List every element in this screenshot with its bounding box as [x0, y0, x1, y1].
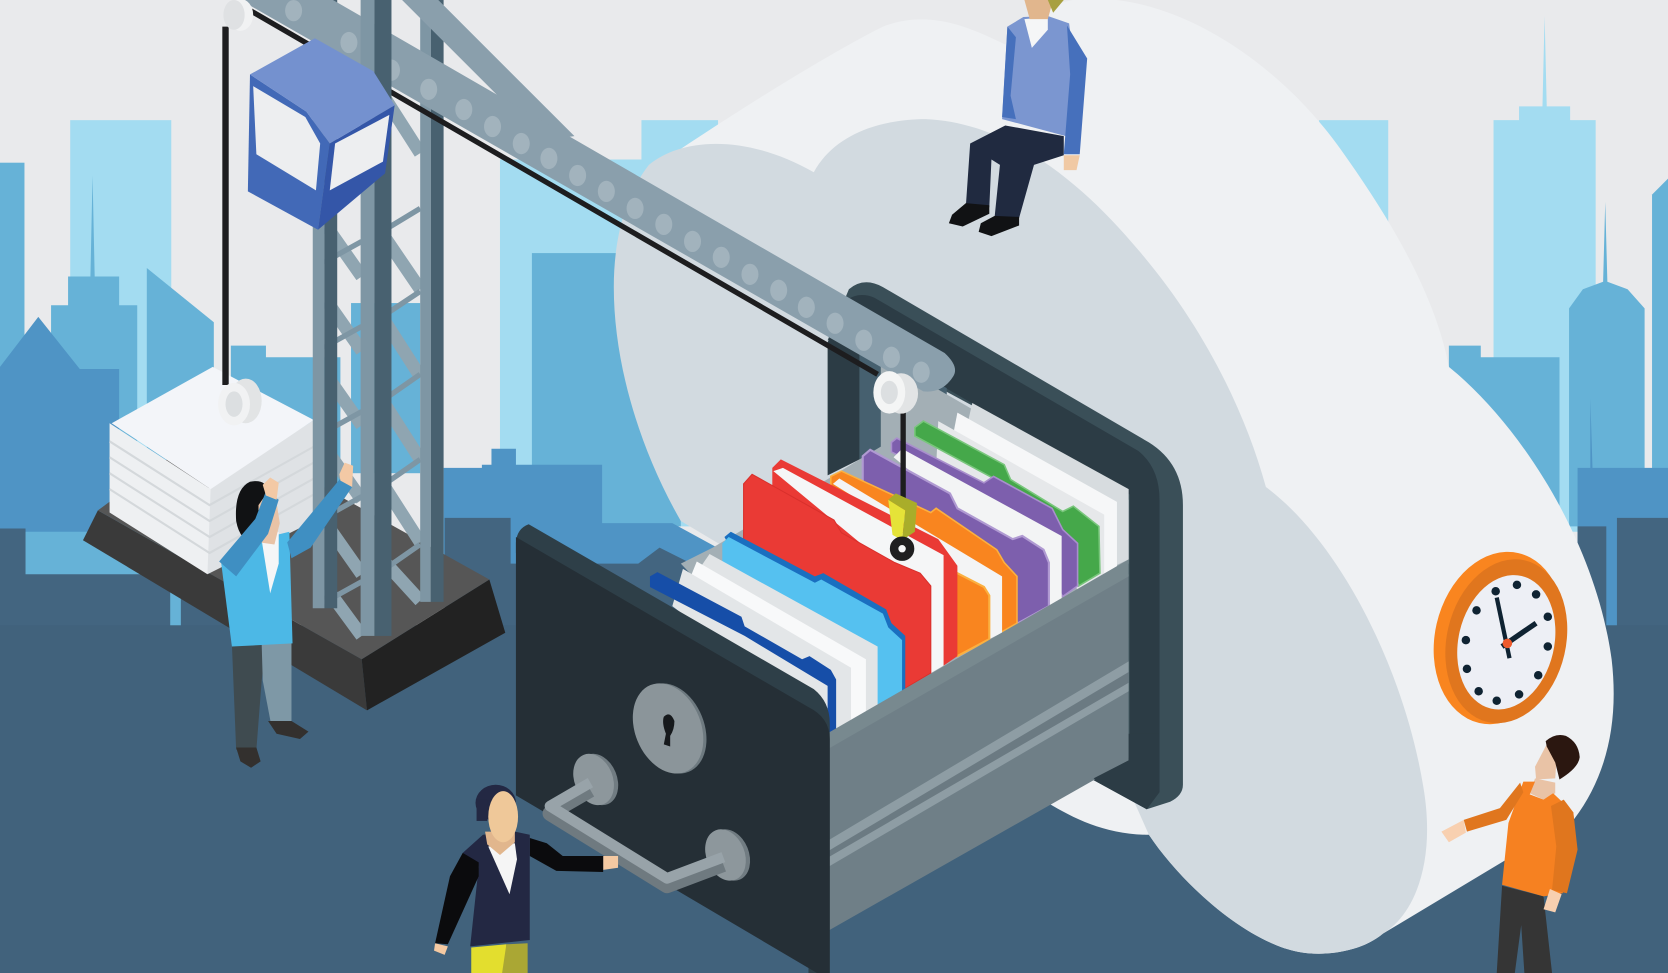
papers in front: [672, 554, 878, 732]
back papers: [936, 403, 1129, 590]
drawer front panel: [516, 524, 830, 973]
crane tower rear legs and lattice: [313, 0, 444, 636]
papers behind red: [773, 468, 944, 673]
crane boom: [240, 0, 955, 392]
crane cable: [226, 9, 903, 502]
dark blue front folder: [650, 572, 836, 734]
papers behind purple: [894, 449, 1062, 608]
hook pulley: [873, 371, 918, 414]
purple folder front: [863, 450, 1049, 623]
cloud: shaded front face: [614, 119, 1427, 954]
keyhole plate: [620, 673, 719, 784]
person: man in orange: [1441, 735, 1580, 973]
city skyline: [0, 16, 1668, 654]
drawer housing: [681, 282, 1183, 809]
crane platform: [83, 425, 505, 710]
stack pulley: [218, 379, 262, 425]
red folder back: [772, 459, 957, 666]
clock: [1417, 539, 1583, 737]
purple folder back: [891, 438, 1078, 597]
person: man in black jacket at handle: [434, 785, 618, 973]
top pulley: [223, 0, 253, 31]
ground: [0, 625, 1668, 973]
light blue folder: [722, 537, 902, 705]
drawer handle: [550, 748, 757, 887]
drawer side: [829, 559, 1160, 930]
orange folder back: [831, 471, 1017, 632]
red folder front: [744, 474, 931, 704]
dark blue back of light blue folder: [724, 532, 905, 700]
person: man sitting on cloud: [949, 0, 1087, 236]
crane hook: [888, 493, 917, 557]
cloud: light extruded side: [681, 0, 1614, 954]
orange folder front: [936, 561, 989, 656]
file folders: [650, 403, 1129, 734]
crane center column: [361, 0, 391, 636]
papers behind orange: [833, 479, 1002, 639]
paper stack: [110, 367, 314, 574]
crane cab: [248, 38, 395, 230]
green folder: [915, 421, 1100, 586]
person: woman in blue: [219, 463, 353, 768]
